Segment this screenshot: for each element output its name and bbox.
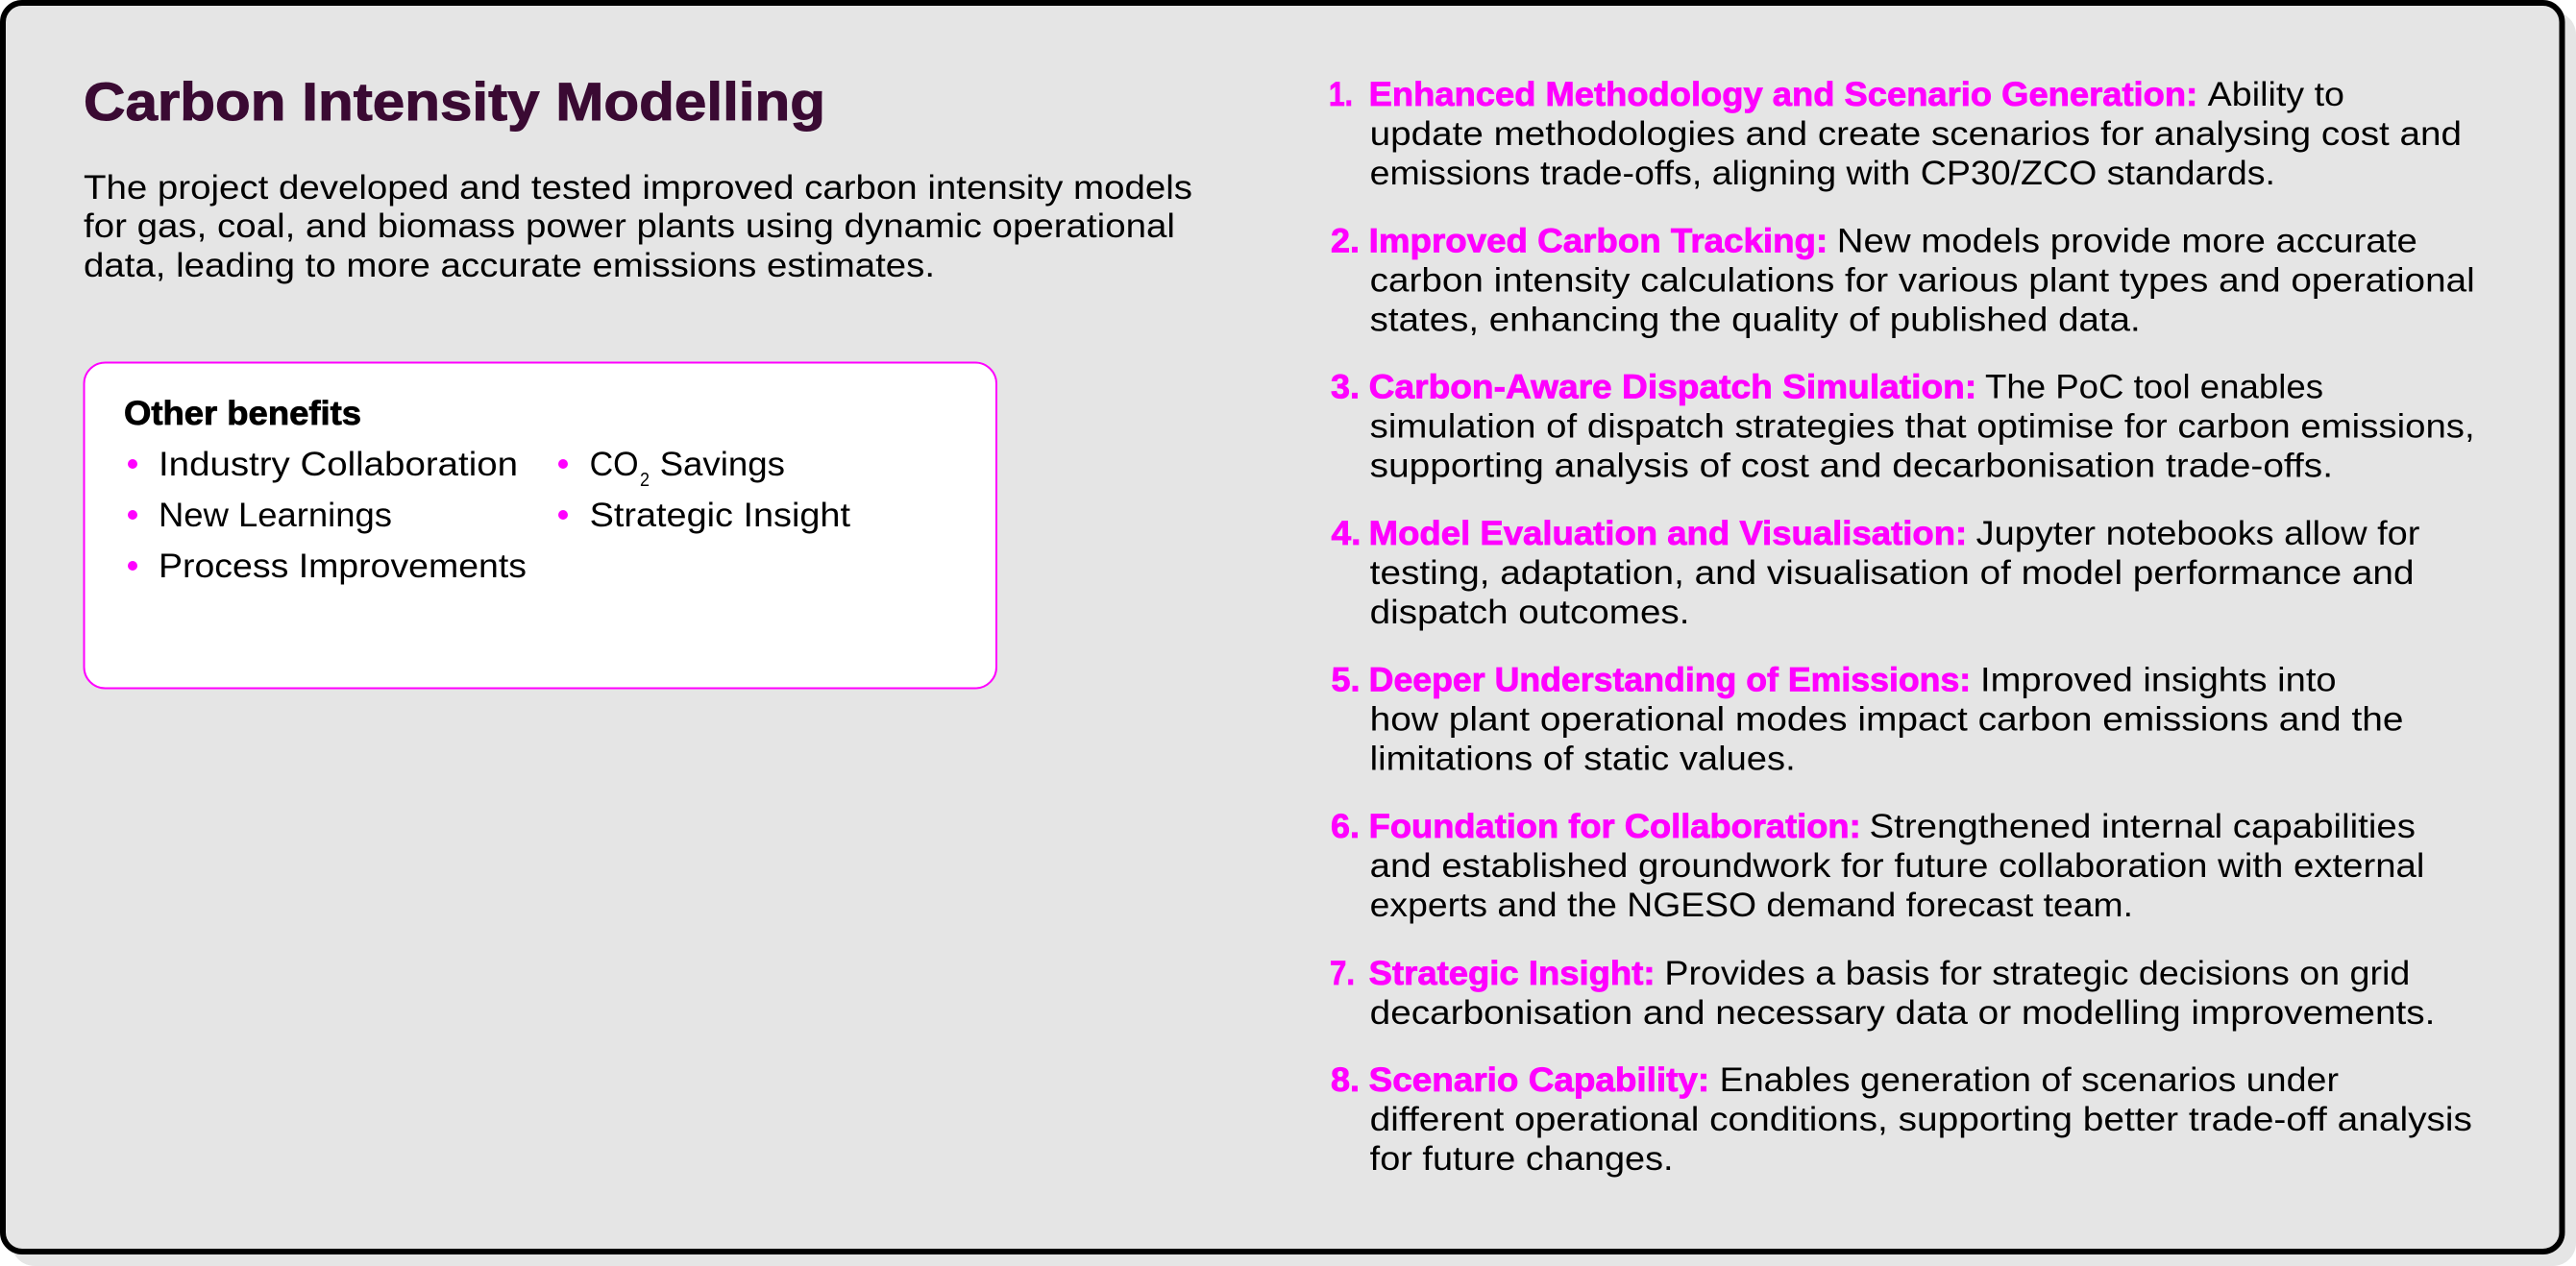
- list item 6: Strengthened internal capabilities: [1870, 808, 2416, 845]
- intro paragraph: [84, 169, 1192, 284]
- list item 5: how plant operational modes impact carbon emissions and the: [1370, 701, 2404, 738]
- bullet: CO2 savings: 2: [640, 470, 650, 491]
- list item 4: testing, adaptation, and visualisation of model performance and: [1370, 554, 2414, 592]
- list item 2: New models provide more accurate: [1837, 223, 2417, 259]
- list item 4: Jupyter notebooks allow for: [1976, 515, 2420, 552]
- list item 2: Improved Carbon Tracking:: [1369, 223, 1828, 259]
- list item 6: [1331, 808, 2424, 924]
- intro paragraph: The project developed and tested improved carbon intensity models: [84, 169, 1192, 207]
- list item 2: carbon intensity calculations for various plant types and operational: [1370, 261, 2475, 300]
- list item 4: [1332, 515, 2420, 631]
- list item 1: [1329, 76, 2462, 192]
- list item 5: Improved insights into: [1980, 661, 2337, 699]
- bullet: industry collaboration: Industry Collaboration: [159, 446, 518, 483]
- list item 1: Enhanced Methodology and Scenario Generation:: [1369, 76, 2197, 113]
- list item 1: 1.: [1329, 76, 1353, 113]
- list item 4: Model Evaluation and Visualisation:: [1369, 515, 1967, 552]
- list item 2: 2.: [1331, 223, 1360, 259]
- list item 6: Foundation for Collaboration:: [1369, 808, 1861, 845]
- list item 5: Deeper Understanding of Emissions:: [1369, 661, 1971, 699]
- list item 4: 4.: [1332, 515, 1361, 552]
- list item 8: Scenario Capability:: [1369, 1061, 1709, 1099]
- list item 7: [1330, 955, 2435, 1032]
- bullet: process improvements: Process Improvements: [159, 548, 527, 585]
- list item 8: different operational conditions, supporting better trade-off analysis: [1370, 1101, 2472, 1138]
- list item 6: 6.: [1331, 808, 1360, 845]
- list item 3: simulation of dispatch strategies that optimise for carbon emissions,: [1370, 407, 2475, 446]
- list item 5: [1332, 661, 2404, 778]
- list item 7: Provides a basis for strategic decisions on grid: [1664, 955, 2410, 992]
- bullet: CO2 savings: [558, 446, 785, 491]
- bullet: strategic insight: Strategic Insight: [590, 497, 850, 534]
- list item 5: 5.: [1332, 661, 1361, 699]
- list item 8: 8.: [1331, 1061, 1360, 1099]
- bullet: new learnings: New Learnings: [159, 497, 392, 534]
- list item 1: emissions trade-offs, aligning with CP30/ZCO standards.: [1370, 155, 2275, 192]
- list item 3: 3.: [1331, 369, 1360, 405]
- list item 3: Carbon-Aware Dispatch Simulation:: [1369, 369, 1976, 405]
- title: Carbon Intensity Modelling: [84, 71, 825, 132]
- list item 5: limitations of static values.: [1370, 740, 1796, 778]
- list item 6: experts and the NGESO demand forecast team.: [1370, 887, 2133, 924]
- list item 1: update methodologies and create scenarios for analysing cost and: [1370, 115, 2462, 153]
- heading: other benefits: Other benefits: [124, 395, 361, 432]
- list item 3: [1331, 369, 2475, 484]
- panel: other benefits: [85, 363, 996, 688]
- list item 1: Ability to: [2208, 76, 2344, 113]
- list item 3: supporting analysis of cost and decarbonisation trade-offs.: [1370, 448, 2333, 484]
- list item 8: [1331, 1061, 2472, 1178]
- list item 2: [1331, 223, 2475, 338]
- list item 8: Enables generation of scenarios under: [1720, 1061, 2339, 1099]
- list item 7: Strategic Insight:: [1369, 955, 1655, 992]
- list item 3: The PoC tool enables: [1985, 369, 2323, 405]
- list item 7: decarbonisation and necessary data or modelling improvements.: [1370, 994, 2435, 1032]
- list item 6: and established groundwork for future collaboration with external: [1370, 847, 2424, 885]
- bullet: CO2 savings: Savings: [660, 446, 785, 483]
- intro paragraph: data, leading to more accurate emissions estimates.: [84, 247, 935, 284]
- list item 4: dispatch outcomes.: [1370, 594, 1689, 631]
- list item 2: states, enhancing the quality of published data.: [1370, 302, 2141, 338]
- list item 8: for future changes.: [1370, 1140, 1674, 1178]
- bullet: CO2 savings: CO: [590, 446, 639, 483]
- intro paragraph: for gas, coal, and biomass power plants using dynamic operational: [84, 207, 1175, 245]
- list item 7: 7.: [1330, 955, 1355, 992]
